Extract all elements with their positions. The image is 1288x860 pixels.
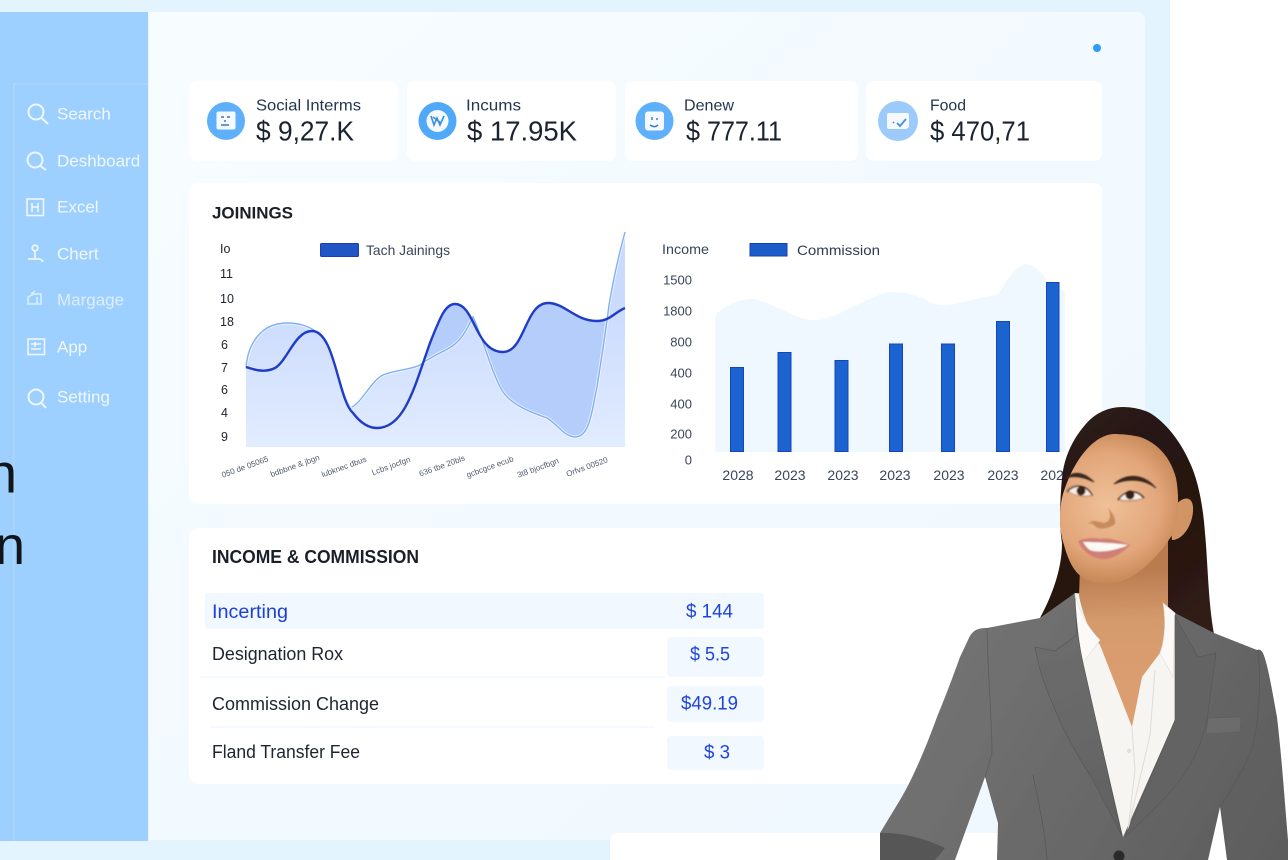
heading: income and commission: INCOME & COMMISSION (212, 547, 419, 567)
y axis labels: joinings (220, 242, 234, 444)
row: Fland Transfer Fee (212, 736, 764, 770)
y axis labels: joinings: 10 (220, 292, 234, 306)
y axis labels: joinings: 6 (221, 338, 228, 352)
right lapel (1125, 615, 1216, 837)
KPI card: Social Interms: $ 9,27.K (256, 116, 354, 146)
legend: commission (662, 241, 880, 258)
x axis labels: joinings: Lcbs jocfgn (370, 455, 412, 477)
legend: tech joinings (320, 242, 450, 258)
y axis labels: joinings: 7 (221, 361, 228, 375)
sleeve fold (880, 833, 945, 860)
status dot (1093, 44, 1101, 52)
face (1060, 434, 1178, 584)
nav item: Excel (27, 198, 99, 216)
x axis labels: joinings: gcbcgce ecub (465, 454, 515, 480)
y axis labels: joinings: 18 (220, 315, 234, 329)
nose (1087, 508, 1115, 528)
x axis labels: joinings: bdbbne & jbgn (269, 453, 321, 479)
y axis labels: joinings: Io (220, 242, 230, 256)
row: Incerting: Incerting (212, 601, 288, 623)
nav item: Manage (28, 290, 124, 310)
KPI card: Denew: Denew (684, 98, 734, 114)
y axis labels: commission: 1800 (663, 304, 692, 318)
nav item: Chart: Chert (57, 244, 99, 264)
x axis labels: commission: 2023 (1040, 467, 1072, 483)
heading: joinings: JOININGS (212, 204, 293, 222)
row: Commission Change: Commission Change (212, 694, 379, 714)
x axis labels: joinings: Orfvs 00520 (565, 455, 610, 479)
nav item: Search: Search (57, 104, 111, 124)
KPI card: Incums: $ 17.95K (467, 116, 577, 146)
facial features (1066, 473, 1156, 559)
x axis labels: commission (722, 467, 1072, 483)
x axis labels: commission: 2023 (827, 467, 859, 483)
x axis labels: commission: 2023 (933, 467, 965, 483)
row: Incerting (205, 593, 764, 629)
panel: income and commission (189, 528, 1102, 784)
y axis labels: joinings: 11 (220, 267, 233, 281)
y axis labels: joinings: 6 (221, 383, 228, 397)
ear (1171, 498, 1193, 540)
KPI card: Social Interms (189, 81, 398, 161)
nav item: Search (28, 104, 111, 124)
x axis labels: joinings: lubknec dbus (320, 455, 368, 479)
row: Incerting: $ 144 (686, 602, 733, 622)
hair (1040, 407, 1214, 634)
y axis labels: joinings: 4 (221, 406, 228, 420)
eyes (1066, 485, 1145, 502)
x axis labels: commission: 2023 (987, 467, 1019, 483)
x axis labels: joinings (220, 453, 610, 480)
row: Fland Transfer Fee: $ 3 (704, 742, 730, 764)
jacket button (1114, 850, 1124, 860)
area line chart (246, 232, 625, 447)
row: Fland Transfer Fee: Fland Transfer Fee (212, 742, 360, 762)
nav item: App: App (57, 338, 87, 356)
row: Commission Change: $49.19 (681, 694, 738, 714)
nav item: Manage: Margage (57, 290, 124, 310)
y axis labels: commission: 200 (670, 426, 692, 442)
row: Designation Rox: $ 5.5 (690, 644, 730, 666)
nav item: Excel: Excel (57, 198, 99, 216)
left lapel (1035, 598, 1122, 836)
x axis labels: commission: 2023 (774, 467, 806, 483)
x axis labels: commission: 2023 (879, 467, 911, 483)
sidebar (0, 12, 148, 841)
row: Designation Rox (212, 637, 764, 677)
main panel (140, 12, 1145, 840)
KPI card: Denew: $ 777.11 (686, 116, 782, 146)
jacket pocket (1206, 717, 1241, 734)
nav item: App (28, 338, 87, 356)
shirt (1075, 593, 1175, 837)
x axis labels: joinings: 3t8 bjocfbgn (516, 456, 560, 480)
KPI card: Food: Food (930, 98, 966, 114)
KPI card: Denew (625, 81, 858, 161)
y axis labels: commission: 800 (670, 334, 692, 350)
KPI card: Incums: Incums (466, 98, 521, 114)
nav item: Chart (28, 244, 99, 264)
bar chart (715, 264, 1065, 452)
y axis labels: commission: 1500 (663, 272, 692, 288)
panel: joinings (189, 183, 1102, 504)
businesswoman portrait (880, 407, 1288, 860)
legend: tech joinings: Tach Jainings (366, 242, 450, 258)
y axis labels: commission: 0 (685, 452, 692, 468)
nav item: Dashboard: Deshboard (57, 152, 140, 170)
shirt collar (1075, 593, 1175, 677)
y axis labels: commission: 400 (670, 366, 692, 380)
eyebrows (1066, 473, 1156, 488)
KPI card: Social Interms: Social Interms (256, 98, 361, 114)
row: Designation Rox: Designation Rox (212, 644, 343, 664)
x axis labels: commission: 2028 (722, 467, 754, 483)
y axis labels: commission (663, 272, 692, 468)
row: Commission Change (212, 686, 764, 722)
legend: commission: Commission (797, 242, 880, 258)
mouth (1078, 538, 1130, 559)
KPI card: Food: $ 470,71 (930, 116, 1030, 146)
KPI card: Incums (407, 81, 616, 161)
nav item: Setting: Setting (57, 388, 110, 406)
x axis labels: joinings: 636 tbe 20bls (418, 454, 466, 478)
y axis labels: commission: 400 (670, 396, 692, 412)
nav item: Setting (28, 388, 110, 408)
x axis labels: joinings: 050 de 05065 (220, 454, 270, 480)
y axis labels: joinings: 9 (221, 430, 228, 444)
bottom white card (610, 833, 1288, 860)
neck and chest (1079, 535, 1168, 727)
legend: commission: Income (662, 241, 709, 257)
jacket (880, 593, 1288, 860)
KPI card: Food (866, 81, 1102, 161)
